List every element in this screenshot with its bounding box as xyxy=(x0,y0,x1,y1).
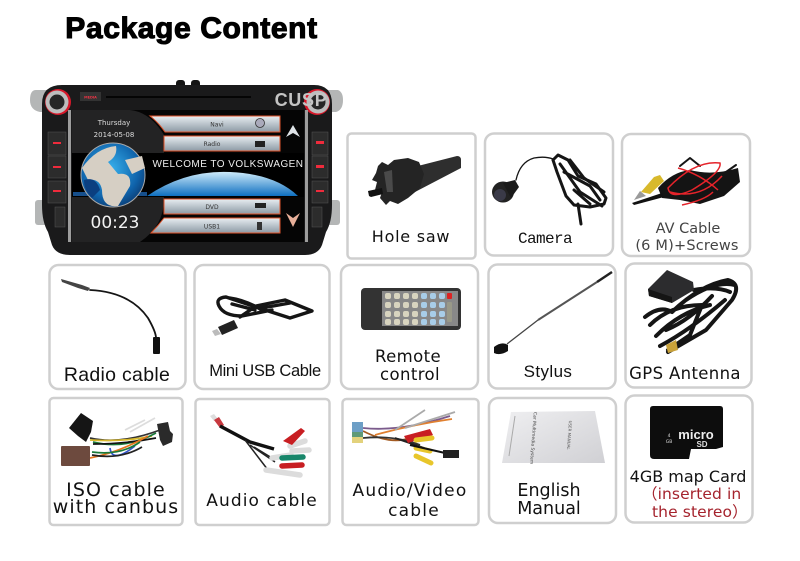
icon: stylus xyxy=(494,272,612,354)
icon: radio cable xyxy=(61,279,160,354)
label: Manual xyxy=(517,499,581,519)
label: ISO cable xyxy=(66,479,166,501)
car stereo unit xyxy=(30,80,343,255)
icon: hole saw xyxy=(368,156,461,205)
panel: remote control xyxy=(341,265,478,389)
label: English xyxy=(517,481,581,501)
label: Mini USB Cable xyxy=(209,362,321,380)
globe xyxy=(81,143,145,207)
icon: ISO cable xyxy=(61,413,173,466)
menu button: DVD: DVD xyxy=(205,204,219,211)
icon: camera xyxy=(492,155,606,224)
icon: audio/video cable xyxy=(352,410,459,463)
red note: （inserted in xyxy=(642,485,741,503)
label xyxy=(375,347,441,384)
label: AV Cable xyxy=(656,221,720,237)
panel: GPS antenna xyxy=(626,264,752,388)
icon: micro SD card: SD xyxy=(696,440,708,449)
watermark: CUSP xyxy=(275,90,327,110)
label xyxy=(353,481,467,521)
date value: 2014-05-08 xyxy=(94,131,134,139)
red note xyxy=(642,485,748,521)
panel: mini USB cable xyxy=(194,265,330,389)
label: Stylus xyxy=(524,362,572,381)
media button and disc slot xyxy=(80,92,251,101)
label: Remote xyxy=(375,347,441,366)
label: (6 M)+Screws xyxy=(635,238,739,254)
icon: micro SD card: micro xyxy=(678,427,714,442)
icon: micro SD card: GB xyxy=(666,439,672,445)
icon: micro SD card: 4 xyxy=(668,433,671,439)
label: Hole saw xyxy=(372,227,450,246)
label: Audio/Video xyxy=(353,481,467,501)
label: Camera xyxy=(518,230,573,248)
welcome text: WELCOME TO VOLKSWAGEN xyxy=(153,159,303,170)
label: 4GB map Card xyxy=(630,467,746,486)
label: Audio cable xyxy=(206,491,318,511)
panel: ISO cable with canbus xyxy=(50,398,182,525)
icon: audio cable xyxy=(210,414,309,475)
panel: 4GB map card xyxy=(626,396,752,522)
clock: 00:23 xyxy=(90,213,140,233)
label xyxy=(53,479,179,518)
icon: micro SD card xyxy=(650,406,723,459)
tune knob xyxy=(304,89,330,115)
icon: manual: Car Multimedia System xyxy=(528,412,538,464)
panel: English manual xyxy=(489,398,616,523)
menu button: Radio: Radio xyxy=(204,141,221,148)
arrow up xyxy=(286,125,300,137)
side buttons xyxy=(48,132,328,227)
panel: audio/video cable xyxy=(342,399,478,525)
label: cable xyxy=(388,501,440,521)
icon: AV cable xyxy=(632,158,740,205)
media button and disc slot: MEDIA xyxy=(84,96,97,100)
icon: remote control xyxy=(361,288,461,330)
panel: hole saw xyxy=(348,134,476,258)
screen xyxy=(68,110,308,242)
arrow down xyxy=(286,213,300,227)
volume knob xyxy=(45,89,71,115)
panel: AV cable and screws xyxy=(622,134,750,256)
icon: manual: USER MANUAL xyxy=(566,420,573,451)
label: control xyxy=(380,365,440,384)
red note: the stereo） xyxy=(652,503,748,521)
label xyxy=(635,221,739,254)
earth horizon xyxy=(147,172,298,196)
panel: stylus xyxy=(488,264,616,388)
menu button: Radio xyxy=(164,136,280,151)
menu button: USB1: USB1 xyxy=(204,224,220,230)
date text: Thursday xyxy=(97,119,130,127)
label: GPS Antenna xyxy=(629,364,741,383)
icon: manual xyxy=(502,411,605,464)
panel: audio cable xyxy=(196,399,330,525)
menu button: DVD xyxy=(164,199,280,214)
menu button: USB1 xyxy=(151,218,280,233)
title: Package Content xyxy=(65,12,318,45)
icon: mini USB cable xyxy=(212,297,312,336)
menu button: Navi xyxy=(150,116,280,132)
label: with canbus xyxy=(53,496,179,518)
menu button: Navi: Navi xyxy=(210,122,224,128)
icon: GPS antenna xyxy=(645,270,736,353)
black welcome band xyxy=(72,153,304,197)
panel: radio cable xyxy=(50,265,186,389)
label xyxy=(517,481,581,519)
mounting brackets xyxy=(30,90,343,225)
label: Radio cable xyxy=(64,364,170,386)
stereo body xyxy=(42,85,332,255)
panel: camera xyxy=(485,134,613,256)
